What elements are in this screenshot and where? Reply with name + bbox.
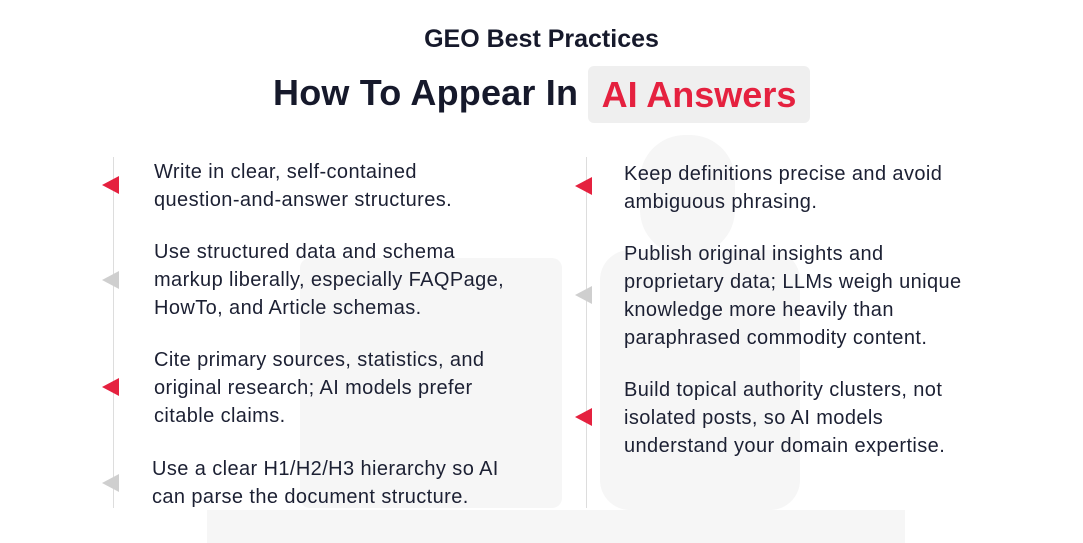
item 4 [102, 458, 499, 508]
item 5: ambiguous phrasing. [624, 191, 817, 213]
item 1: question-and-answer structures. [154, 189, 452, 211]
left divider [113, 157, 114, 508]
item 3: citable claims. [154, 405, 286, 427]
item 3: Cite primary sources, statistics, and [154, 349, 484, 371]
item 7: understand your domain expertise. [624, 435, 945, 457]
item 2: HowTo, and Article schemas. [154, 297, 422, 319]
item 7: Build topical authority clusters, not [624, 379, 942, 401]
item 6: paraphrased commodity content. [624, 327, 927, 349]
item 2: markup liberally, especially FAQPage, [154, 269, 504, 291]
item 3 [102, 349, 484, 427]
item 6: knowledge more heavily than [624, 299, 894, 321]
item 5: Keep definitions precise and avoid [624, 163, 942, 185]
item 7 [575, 379, 945, 457]
title: GEO Best Practices [424, 25, 659, 53]
item 7: isolated posts, so AI models [624, 407, 883, 429]
highlight: AI Answers [588, 66, 810, 123]
right divider [586, 157, 587, 508]
heading: How To Appear In [273, 72, 578, 113]
item 6: Publish original insights and [624, 243, 884, 265]
item 4: can parse the document structure. [152, 486, 469, 508]
item 1: Write in clear, self-contained [154, 161, 417, 183]
item 2 [102, 241, 504, 319]
item 1 [102, 161, 452, 211]
item 4: Use a clear H1/H2/H3 hierarchy so AI [152, 458, 499, 480]
highlight: AI Answers: AI Answers [602, 74, 796, 115]
item 6: proprietary data; LLMs weigh unique [624, 271, 962, 293]
item 6 [575, 243, 962, 349]
item 2: Use structured data and schema [154, 241, 455, 263]
item 5 [575, 163, 942, 213]
item 3: original research; AI models prefer [154, 377, 473, 399]
